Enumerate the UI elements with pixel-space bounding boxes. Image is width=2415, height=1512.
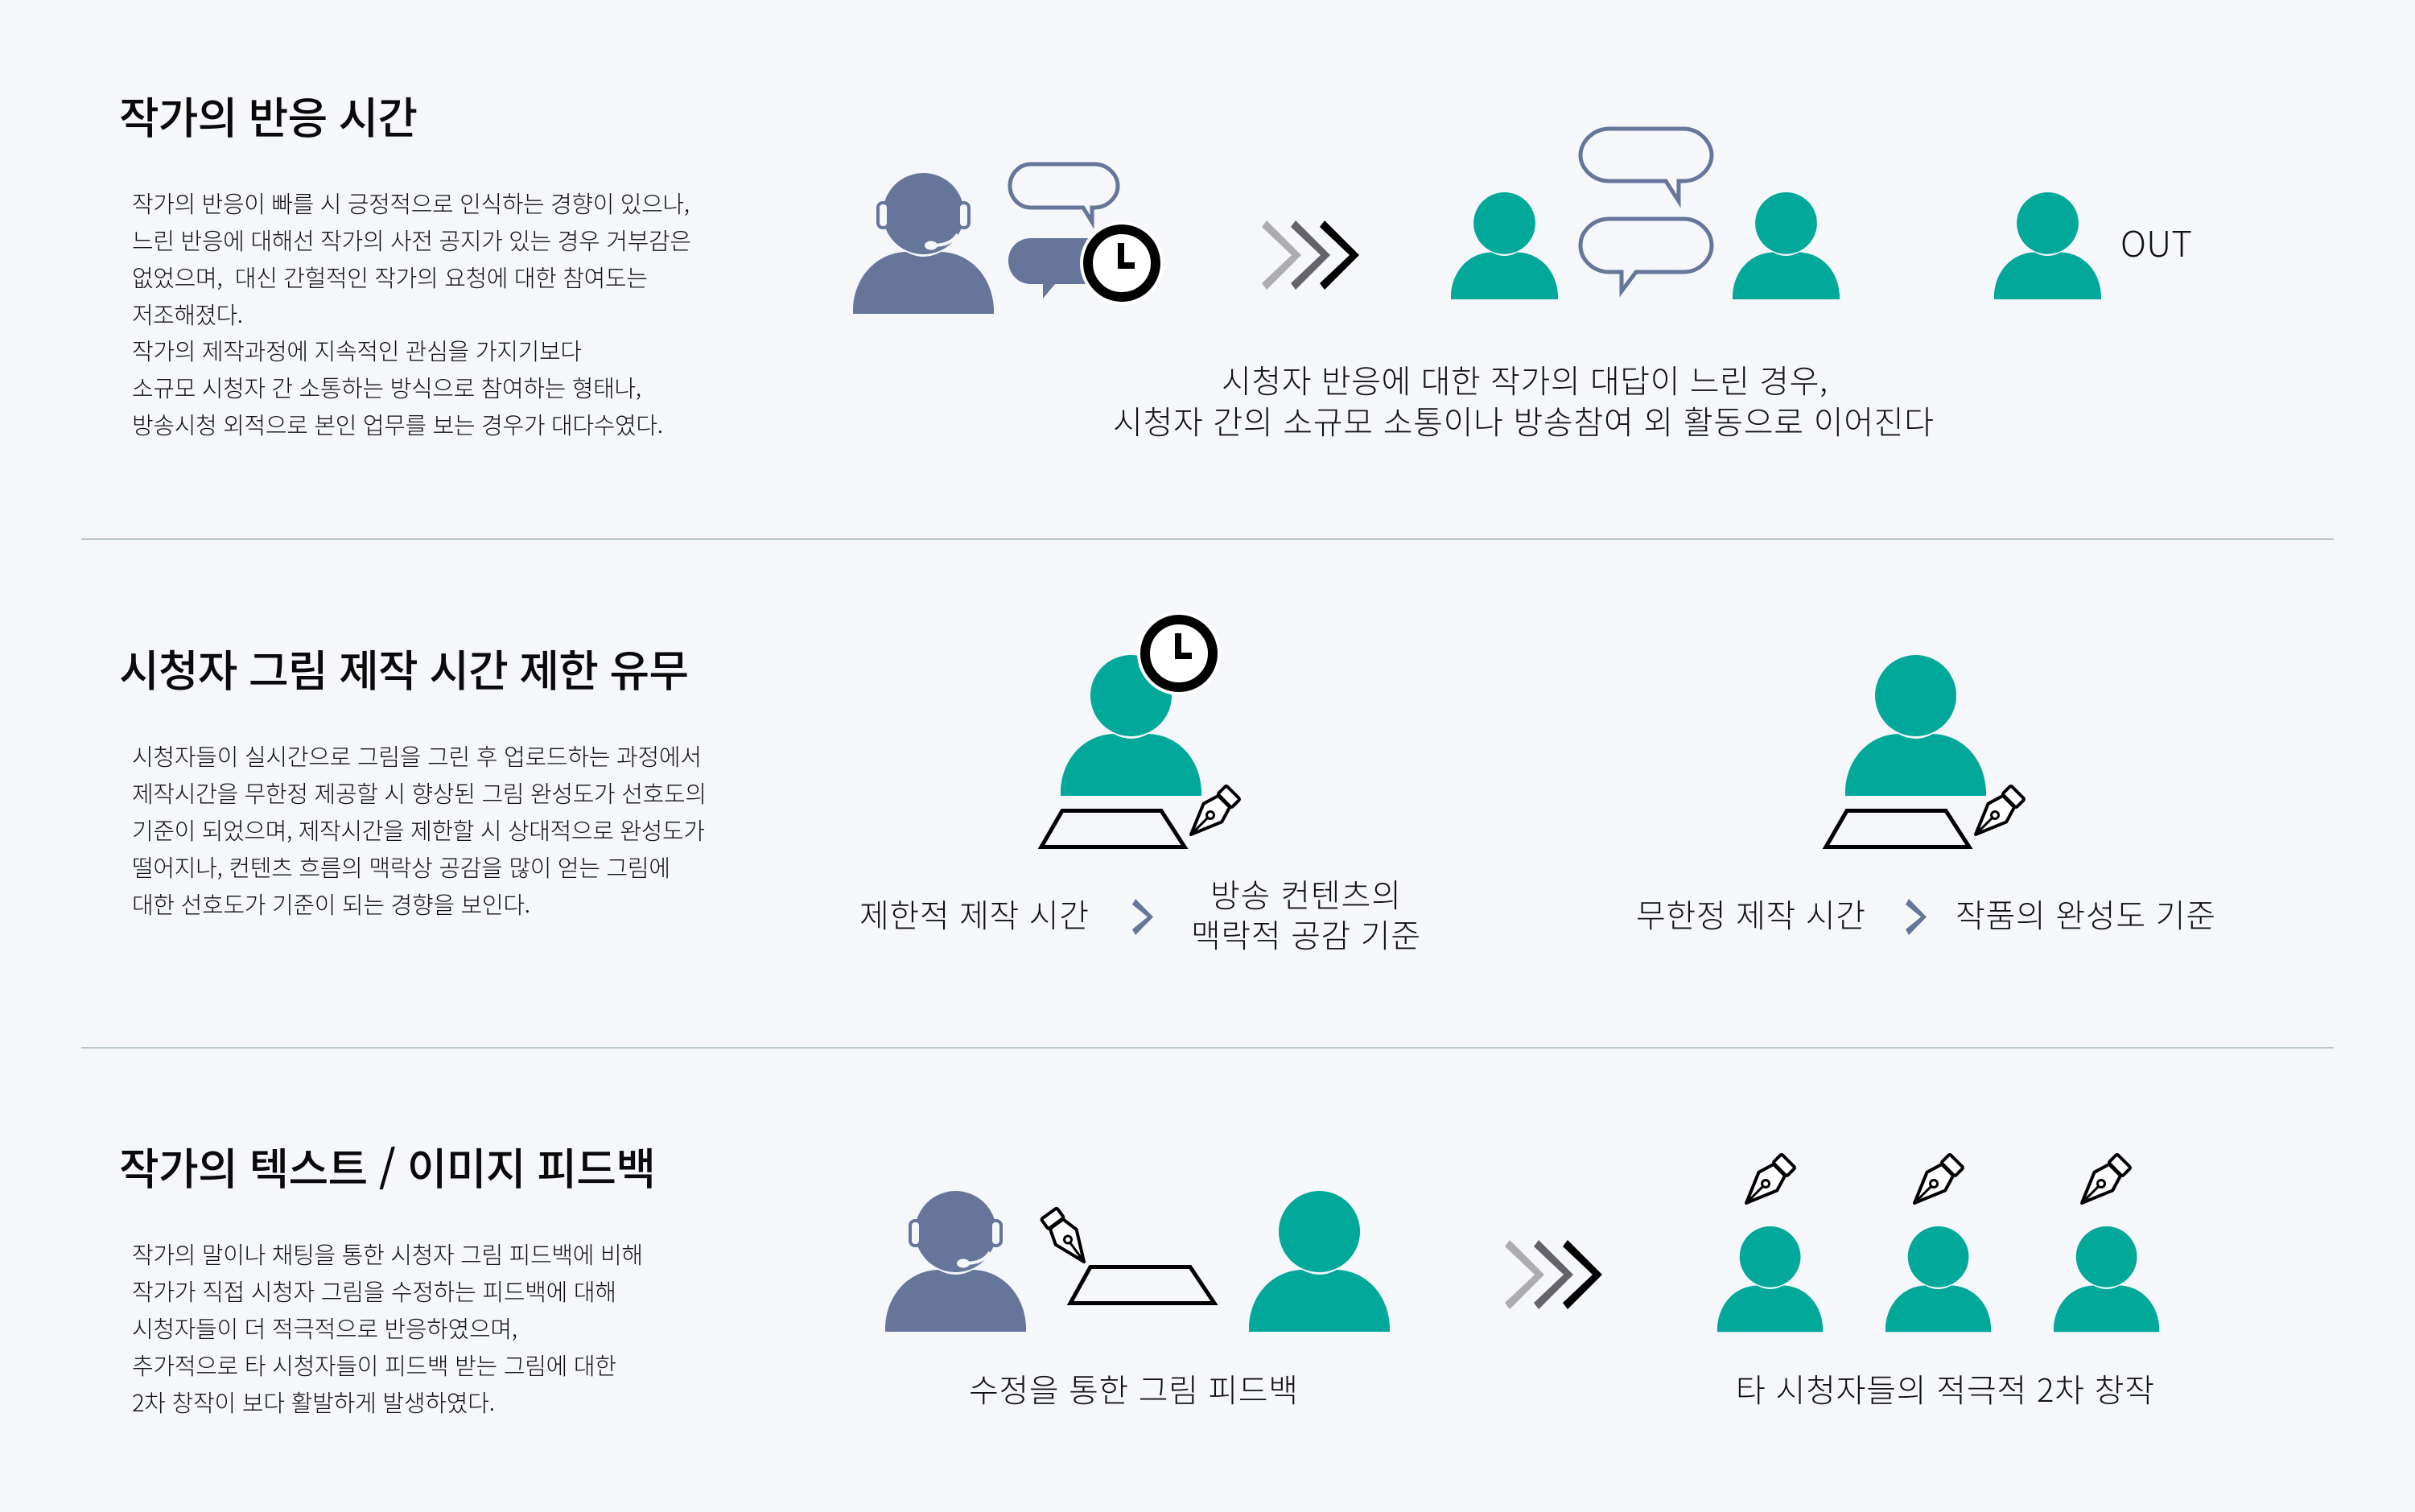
icon: clock [1080, 221, 1164, 305]
text block: time limit description [132, 739, 707, 921]
text block: response time description: 소규모 시청자 간 소통하는 방식으로 참여하는 형태나, [132, 370, 641, 404]
text block: feedback description [132, 1237, 643, 1419]
icon: viewer limited time [1061, 655, 1201, 796]
text block: feedback description: 2차 창작이 보다 활발하게 발생하였다. [132, 1385, 495, 1419]
icon: filled speech bubble [1008, 238, 1119, 299]
caption: slow response: 시청자 반응에 대한 작가의 대답이 느린 경우, [1222, 356, 1828, 402]
caption: slow response [1113, 356, 1934, 443]
text block: response time description: 저조해졌다. [132, 297, 243, 331]
text block: feedback description: 작가가 직접 시청자 그림을 수정하는 피드백에 대해 [132, 1274, 616, 1308]
icon: viewer unlimited time [1845, 655, 1986, 796]
text block: response time description: 작가의 반응이 빠를 시 긍정적으로 인식하는 경향이 있으나, [132, 186, 690, 220]
icon: author with headset [885, 1191, 1026, 1332]
heading: feedback: 작가의 텍스트 / 이미지 피드백 [119, 1134, 656, 1197]
arrow: triple chevrons [1505, 1240, 1602, 1309]
label: artwork completeness: 작품의 완성도 기준 [1955, 890, 2215, 937]
text block: response time description: 방송시청 외적으로 본인 업무를 보는 경우가 대다수였다. [132, 407, 663, 441]
label: context criteria [1191, 870, 1420, 957]
text block: time limit description: 시청자들이 실시간으로 그림을 그린 후 업로드하는 과정에서 [132, 739, 702, 772]
text block: time limit description: 대한 선호도가 기준이 되는 경향을 보인다. [132, 887, 530, 921]
icon: bubble upper [1580, 129, 1712, 201]
panel: text and image feedback [119, 1134, 2159, 1419]
heading: drawing time limit: 시청자 그림 제작 시간 제한 유무 [119, 636, 689, 699]
label: context criteria: 맥락적 공감 기준 [1191, 910, 1420, 957]
icon: bubble lower [1580, 219, 1712, 291]
icon: outlined speech bubble [1010, 164, 1118, 222]
icon: canvas [1070, 1267, 1214, 1304]
icon: viewer 1 [1717, 1226, 1823, 1332]
arrow: triple chevrons [1262, 220, 1359, 290]
label: limited time: 제한적 제작 시간 [859, 890, 1089, 937]
text block: response time description: 없었으며, 대신 간헐적인 작가의 요청에 대한 참여도는 [132, 260, 648, 294]
divider [81, 1047, 2334, 1049]
icon: pen 1 [1737, 1152, 1798, 1212]
label: secondary creation: 타 시청자들의 적극적 2차 창작 [1736, 1365, 2154, 1411]
icon: viewer 3 [2054, 1226, 2159, 1332]
icon: clock [1137, 612, 1221, 695]
text block: time limit description: 떨어지나, 컨텐츠 흐름의 맥락상 공감을 많이 얻는 그림에 [132, 850, 670, 884]
text block: response time description: 느린 반응에 대해선 작가의 사전 공지가 있는 경우 거부감은 [132, 223, 691, 257]
icon: viewer left [1451, 192, 1558, 299]
icon: pen [1967, 783, 2027, 843]
label: context criteria: 방송 컨텐츠의 [1210, 870, 1401, 917]
panel: viewer drawing time limit [119, 612, 2215, 957]
icon: canvas [1041, 811, 1185, 847]
label: feedback through correction: 수정을 통한 그림 피드백 [969, 1365, 1298, 1411]
icon: viewer right [1733, 192, 1840, 299]
icon: canvas [1826, 811, 1969, 847]
text block: response time description: 작가의 제작과정에 지속적인 관심을 가지기보다 [132, 333, 582, 367]
icon: author with headset [853, 173, 994, 314]
icon: viewer leaving [1994, 192, 2101, 299]
text block: feedback description: 시청자들이 더 적극적으로 반응하였으며, [132, 1311, 517, 1345]
text block: time limit description: 기준이 되었으며, 제작시간을 제한할 시 상대적으로 완성도가 [132, 813, 705, 847]
heading: author response time: 작가의 반응 시간 [119, 83, 418, 146]
text block: feedback description: 추가적으로 타 시청자들이 피드백 받는 그림에 대한 [132, 1348, 616, 1382]
arrow: small chevron [1132, 899, 1153, 935]
icon: pen 2 [1906, 1152, 1966, 1212]
panel: author response time [119, 83, 2192, 443]
text block: time limit description: 제작시간을 무한정 제공할 시 향상된 그림 완성도가 선호도의 [132, 776, 707, 810]
icon: pen [1182, 783, 1243, 843]
divider [81, 538, 2334, 540]
caption: slow response: 시청자 간의 소규모 소통이나 방송참여 외 활동으로 이어진다 [1113, 397, 1934, 443]
label: unlimited time: 무한정 제작 시간 [1636, 890, 1865, 937]
text block: feedback description: 작가의 말이나 채팅을 통한 시청자 그림 피드백에 비해 [132, 1237, 643, 1271]
text block: response time description [132, 186, 691, 441]
icon: viewer [1249, 1191, 1390, 1332]
icon: viewer 2 [1885, 1226, 1991, 1332]
icon: pen 3 [2073, 1152, 2133, 1212]
icon: pen [1039, 1206, 1094, 1269]
label: OUT: OUT [2120, 216, 2192, 267]
arrow: small chevron [1906, 899, 1927, 935]
